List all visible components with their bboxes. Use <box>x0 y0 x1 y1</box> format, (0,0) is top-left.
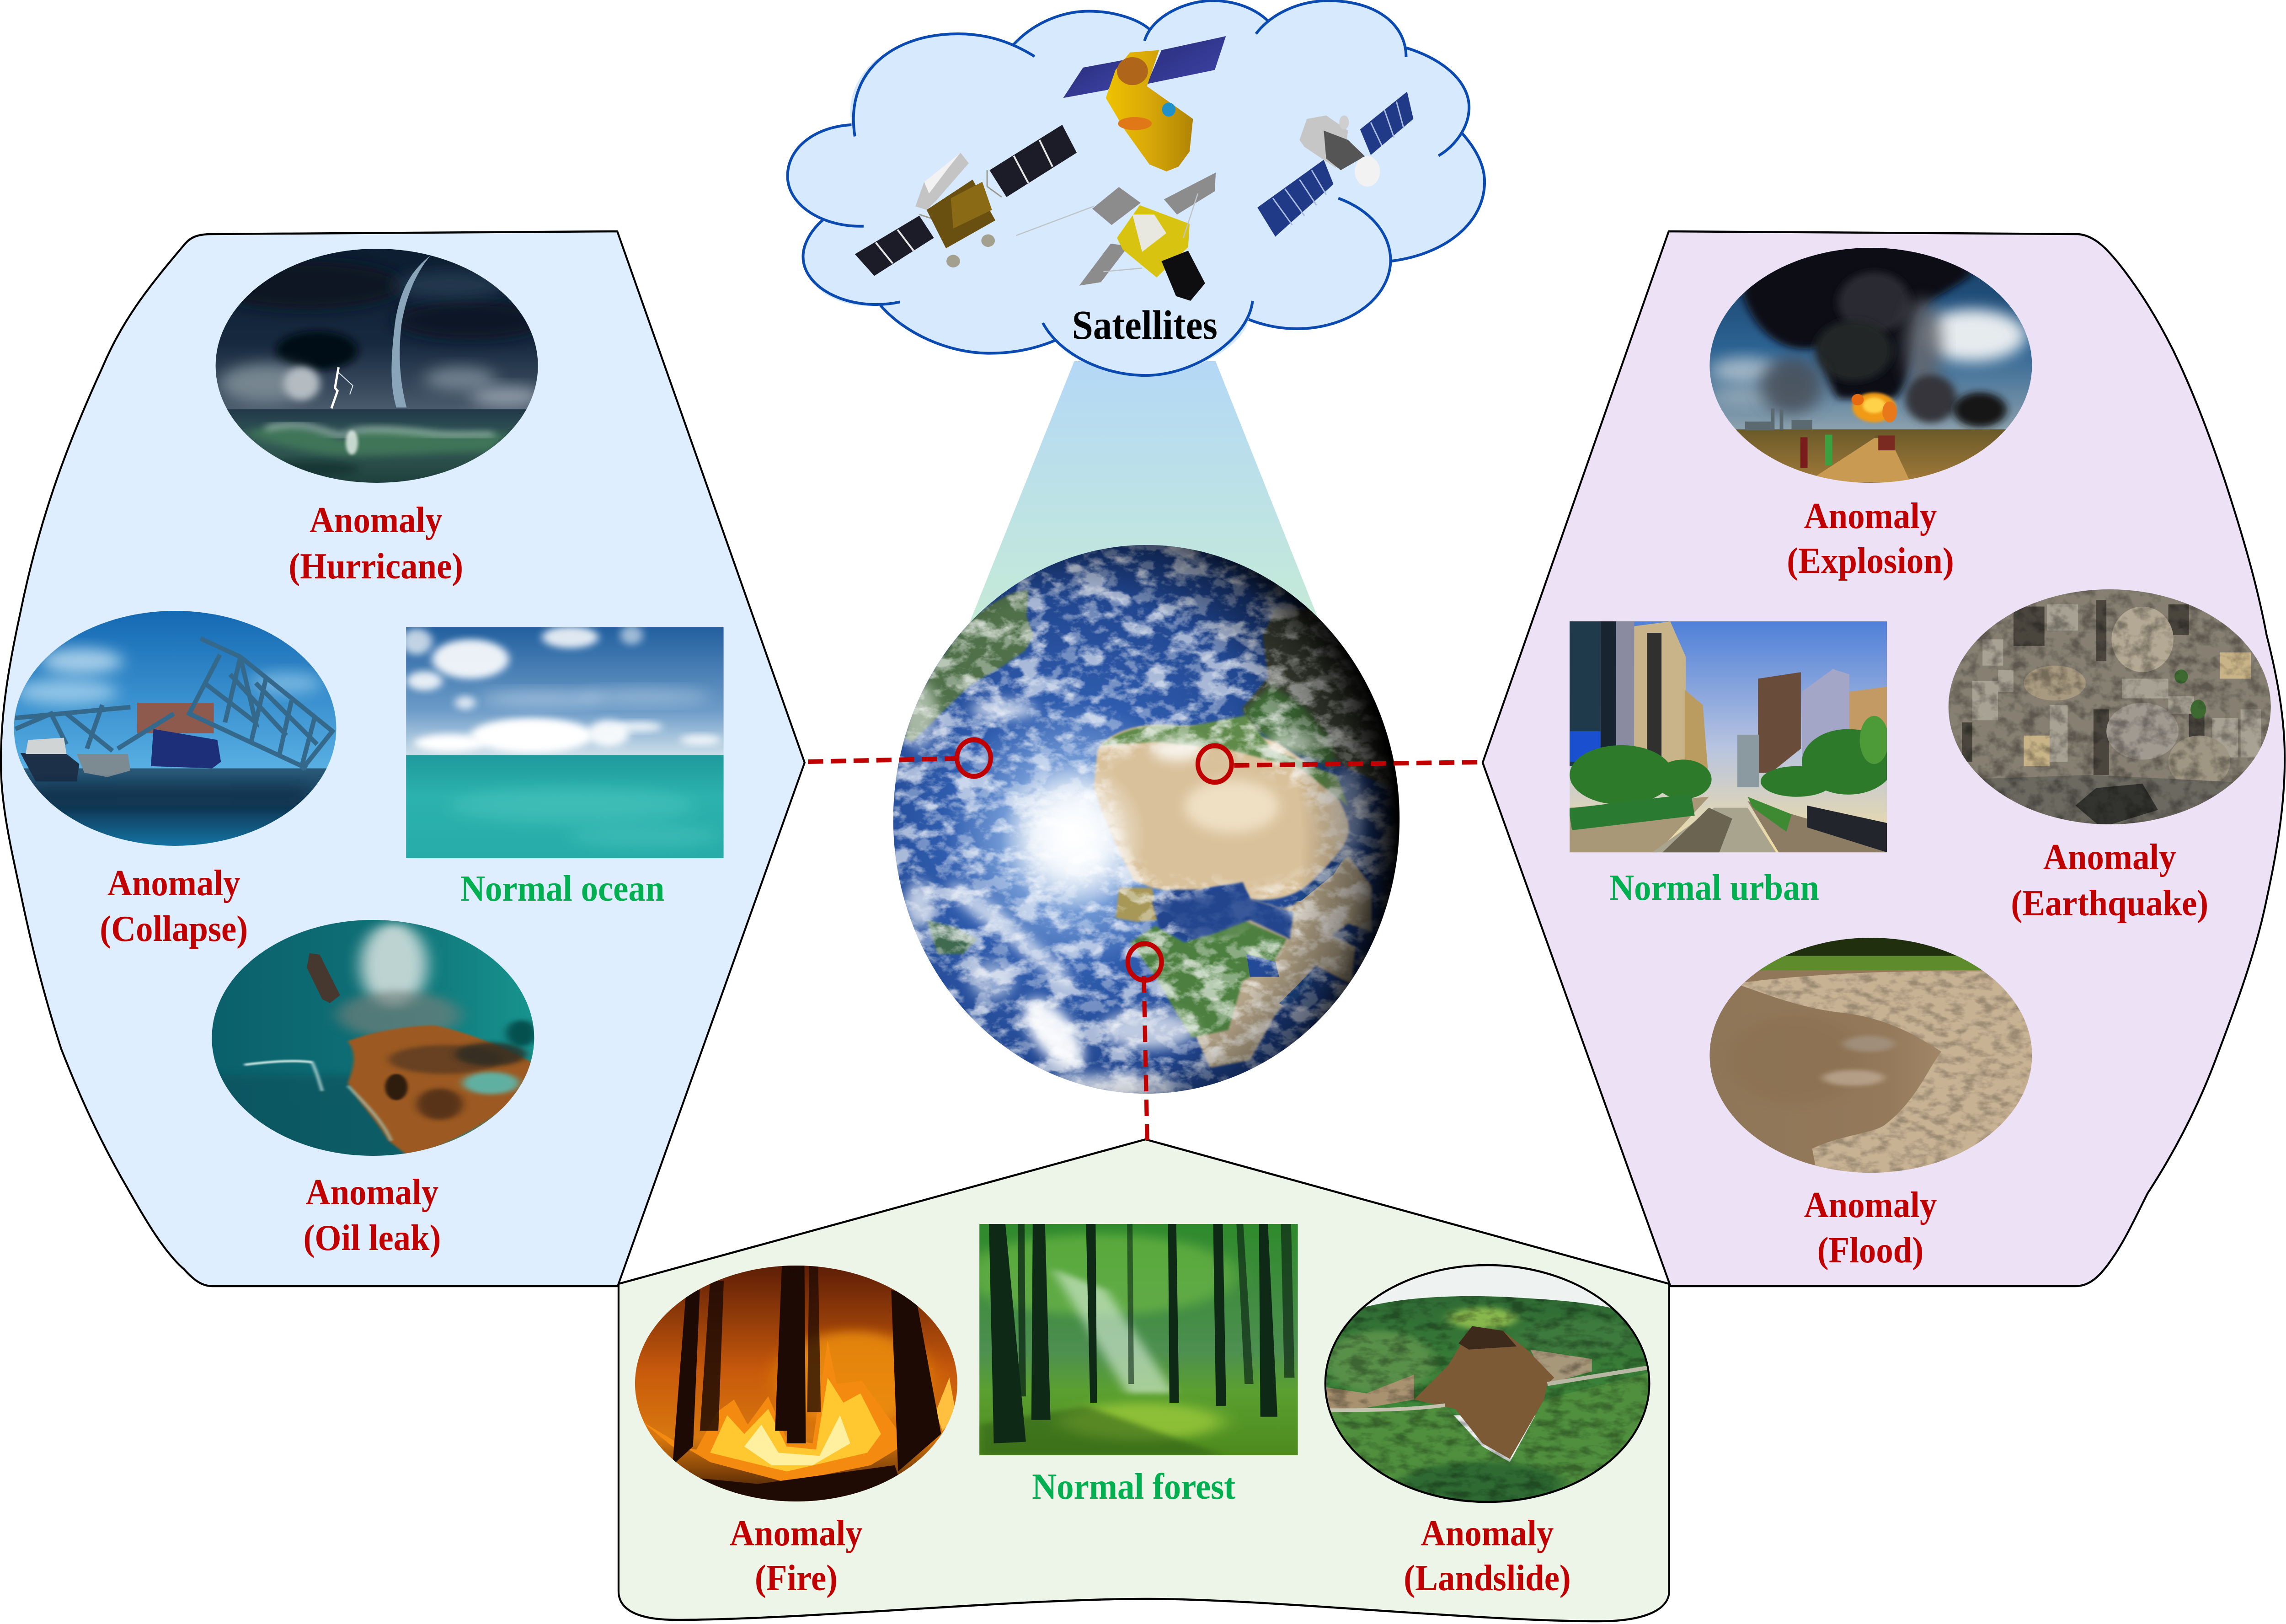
label: normal forest: Normal forest <box>1032 1466 1235 1507</box>
land: lower right <box>1166 855 1372 1068</box>
land: upper left continent <box>905 590 1034 742</box>
land: lower left islands <box>927 920 977 954</box>
label: anomaly fire: (Fire) <box>755 1557 838 1598</box>
satellite: gold body with blue panels <box>1063 36 1226 171</box>
clouds: turbulence texture <box>887 537 1410 1106</box>
label: anomaly flood: Anomaly <box>1804 1184 1937 1225</box>
connector: urban panel to marker <box>1234 762 1482 765</box>
label: anomaly collapse: Anomaly <box>107 862 240 903</box>
label: anomaly flood: (Flood) <box>1817 1229 1923 1271</box>
marker: forest location <box>1128 944 1162 980</box>
label: anomaly earthquake: Anomaly <box>2043 836 2176 877</box>
label: normal urban: Normal urban <box>1609 867 1819 908</box>
label: anomaly collapse: (Collapse) <box>100 908 248 949</box>
connector: ocean panel to marker <box>808 759 956 762</box>
photo: oil leak <box>204 915 542 1159</box>
satellite: dark solar panels <box>855 125 1077 276</box>
label: satellites: Satellites <box>1072 302 1218 348</box>
photo: landslide <box>1319 1262 1660 1506</box>
marker: urban location <box>1198 746 1232 782</box>
label: anomaly hurricane: Anomaly <box>310 499 443 540</box>
earth globe <box>886 537 1410 1106</box>
label: anomaly earthquake: (Earthquake) <box>2011 882 2208 924</box>
marker: ocean location <box>957 740 991 776</box>
night side shading <box>886 540 1405 1102</box>
photo: normal urban <box>1569 621 1895 852</box>
land: iberia <box>1116 888 1159 922</box>
photo: wildfire <box>628 1262 963 1506</box>
label: anomaly explosion: Anomaly <box>1804 495 1937 536</box>
landslide photo border <box>1325 1265 1649 1502</box>
photo: explosion <box>1704 241 2039 486</box>
connector: forest panel to marker <box>1144 976 1147 1140</box>
ocean panel outline <box>1 231 805 1286</box>
glare <box>988 749 1159 928</box>
photo: earthquake rubble <box>1941 587 2277 828</box>
panel: forest scenes <box>619 1139 1669 1621</box>
forest panel outline <box>619 1139 1669 1621</box>
land: green strip <box>1101 715 1348 806</box>
photo: bridge collapse <box>10 609 342 849</box>
water: inland seas <box>1152 882 1293 941</box>
photo: flood <box>1704 936 2039 1178</box>
land: green peninsula <box>1130 920 1287 1037</box>
label: anomaly landslide: (Landslide) <box>1404 1557 1571 1598</box>
land: central desert continent <box>1094 725 1349 905</box>
satellites cloud <box>788 1 1485 375</box>
photo: normal forest <box>963 1224 1298 1455</box>
photo: normal ocean <box>401 625 724 859</box>
ocean base <box>887 537 1410 1106</box>
satellite: white body with blue panels <box>1257 91 1413 237</box>
urban panel outline <box>1483 231 2285 1286</box>
land: desert shading <box>1185 780 1279 833</box>
panel: urban scenes <box>1483 231 2285 1286</box>
panel: ocean scenes <box>1 231 805 1286</box>
clouds: bright systems <box>901 681 1366 1098</box>
label: anomaly oil leak: Anomaly <box>306 1171 438 1213</box>
satellite: yellow body with telescope <box>1016 172 1216 301</box>
photo: hurricane <box>216 249 538 483</box>
label: anomaly fire: Anomaly <box>730 1512 863 1554</box>
label: anomaly landslide: Anomaly <box>1421 1512 1554 1554</box>
land: upper right continent <box>1243 609 1399 791</box>
land: upper right green <box>1243 685 1337 769</box>
label: anomaly explosion: (Explosion) <box>1787 540 1954 581</box>
label: anomaly hurricane: (Hurricane) <box>288 545 463 587</box>
cloud shape <box>788 1 1485 375</box>
label: normal ocean: Normal ocean <box>460 868 664 909</box>
label: anomaly oil leak: (Oil leak) <box>303 1217 441 1258</box>
satellite view beam <box>949 361 1342 686</box>
